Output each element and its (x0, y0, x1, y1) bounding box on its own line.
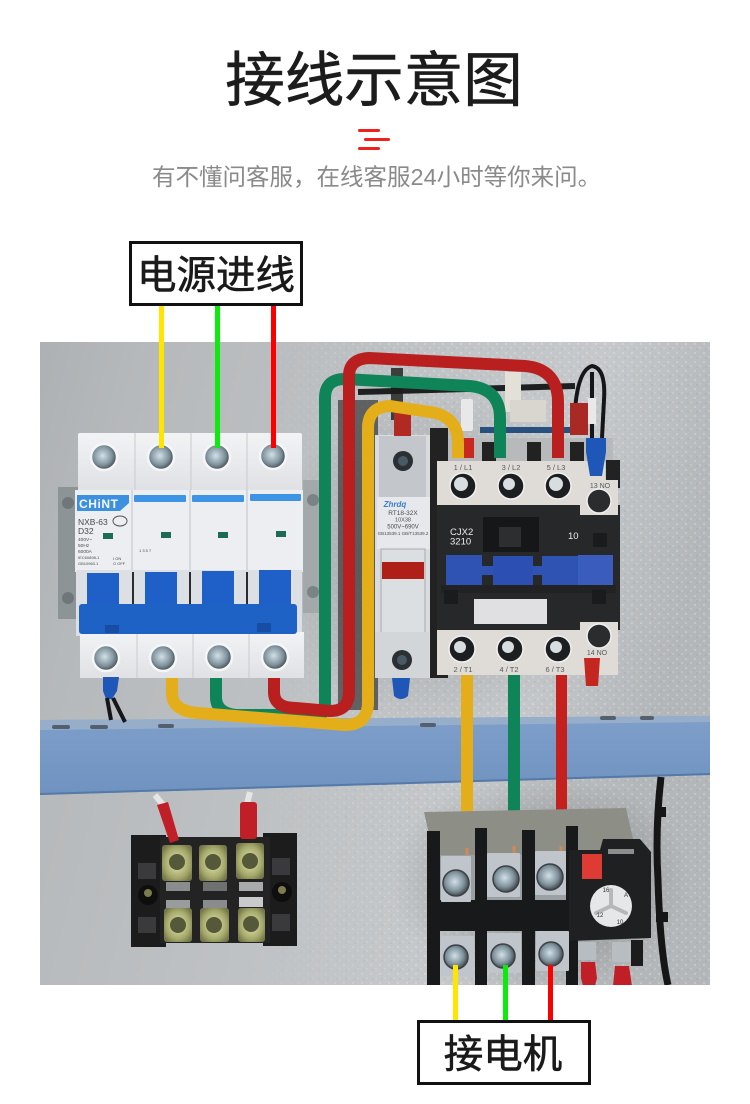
contactor screws (449, 473, 611, 662)
breaker screws (91, 443, 288, 671)
panel: wiring photo (40, 342, 710, 1000)
terminal block (131, 792, 297, 947)
overload relay head (569, 839, 651, 941)
breaker rating text: O OFF (113, 561, 126, 566)
breaker rating text: NXB-63 (78, 517, 108, 527)
callout lines: power input (159, 305, 276, 448)
callout: power input label (130, 242, 302, 304)
breaker (75, 433, 304, 678)
contactor model text: 10 (568, 531, 579, 542)
fuse label text: Zhrdq (383, 500, 406, 509)
breaker body (75, 490, 303, 572)
terminal labels: 14 NO (587, 650, 608, 657)
fuse label text: 10X38 (395, 518, 411, 524)
contactor model text (450, 528, 578, 544)
title: 接线示意图 (225, 47, 523, 114)
lug: red above fuse (394, 410, 411, 436)
blue lug below breaker (103, 677, 125, 722)
pole labels (134, 494, 301, 502)
black cable right (655, 777, 668, 985)
thermal overload relay: 12 (597, 913, 604, 919)
breaker bottom caps (80, 632, 304, 678)
overload dividers (427, 826, 578, 1000)
green wire (216, 379, 500, 715)
brand tag (77, 495, 129, 511)
red lug lower right (584, 658, 600, 686)
thermal overload relay: 10 (617, 920, 624, 926)
dial (590, 885, 632, 927)
callout: power input label: 电源进线 (137, 254, 295, 298)
terminal labels: 5 / L3 (547, 463, 565, 472)
contactor model text: CJX2 (450, 527, 473, 538)
marker sleeve (461, 399, 473, 431)
callout: motor label (418, 1022, 590, 1084)
dark backing behind wires (338, 400, 378, 710)
breaker top caps (78, 433, 302, 491)
gold screw plates (162, 843, 265, 942)
indicator windows (103, 531, 286, 539)
terminal labels: 4 / T2 (499, 665, 519, 674)
breaker rating text: 1 3 5 7 (139, 548, 152, 553)
blue handles (87, 570, 291, 607)
fuse label text: RT18-32X (388, 510, 418, 517)
terminal labels (453, 463, 611, 674)
photo background (40, 342, 710, 985)
breaker rating text: GB10963.1 (78, 561, 99, 566)
red lug upper right (570, 403, 588, 435)
red wire (274, 358, 558, 711)
cable tie bundle top (358, 368, 575, 433)
breaker rating text: 6000A (78, 549, 93, 555)
blue lug upper right (586, 438, 606, 476)
breaker rating text: 50Hz (78, 543, 90, 549)
breaker rating text (78, 517, 152, 566)
terminal labels: 3 / L2 (502, 463, 520, 472)
breaker rating text: I ON (113, 556, 121, 561)
red reset button (582, 854, 602, 879)
fuse label text: GB13539.1 GB/T13539.2 (378, 531, 429, 536)
terminal labels: 6 / T3 (545, 665, 565, 674)
relay lower lugs (578, 942, 596, 960)
contactor center block (483, 517, 539, 552)
white wire marker (588, 398, 596, 424)
terminal labels: 1 / L1 (454, 463, 472, 472)
blue lug below fuse (392, 678, 410, 699)
breaker rating text: 400V~ (78, 537, 92, 543)
thermal overload relay: 16 (603, 888, 610, 894)
contactor (430, 428, 620, 678)
icon: red menu lines (358, 129, 390, 150)
blue armature (446, 555, 613, 586)
red lugs with white sleeves (155, 795, 164, 806)
fuse label text: 500V~690V (387, 524, 419, 530)
din rail behind breaker (58, 480, 319, 619)
subtitle: 有不懂问客服，在线客服24小时等你来问。 (152, 164, 601, 190)
white nameplate (474, 599, 547, 624)
steel terminal plates (441, 851, 569, 976)
callout lines: motor (453, 965, 553, 1021)
breaker rating text: D32 (78, 526, 94, 536)
blue tie bar (79, 604, 297, 634)
breaker: CHiNT (79, 497, 119, 511)
contactor model text: 3210 (450, 536, 471, 548)
fuse label text (378, 500, 429, 536)
thermal overload relay (424, 808, 651, 1000)
terminal labels: 2 / T1 (453, 665, 473, 674)
control wire loop (575, 366, 604, 438)
breaker rating text: IEC60898-1 (78, 555, 100, 560)
blue mounting rail (40, 716, 710, 795)
thermal overload relay: A (624, 893, 628, 899)
fuse holder (375, 435, 430, 678)
callout: motor label: 接电机 (444, 1033, 562, 1077)
lower contactor wires (461, 675, 473, 812)
yellow wire (172, 406, 458, 725)
red lug center top (464, 438, 474, 458)
terminal labels: 13 NO (590, 483, 611, 490)
copper wire ends (467, 846, 561, 855)
